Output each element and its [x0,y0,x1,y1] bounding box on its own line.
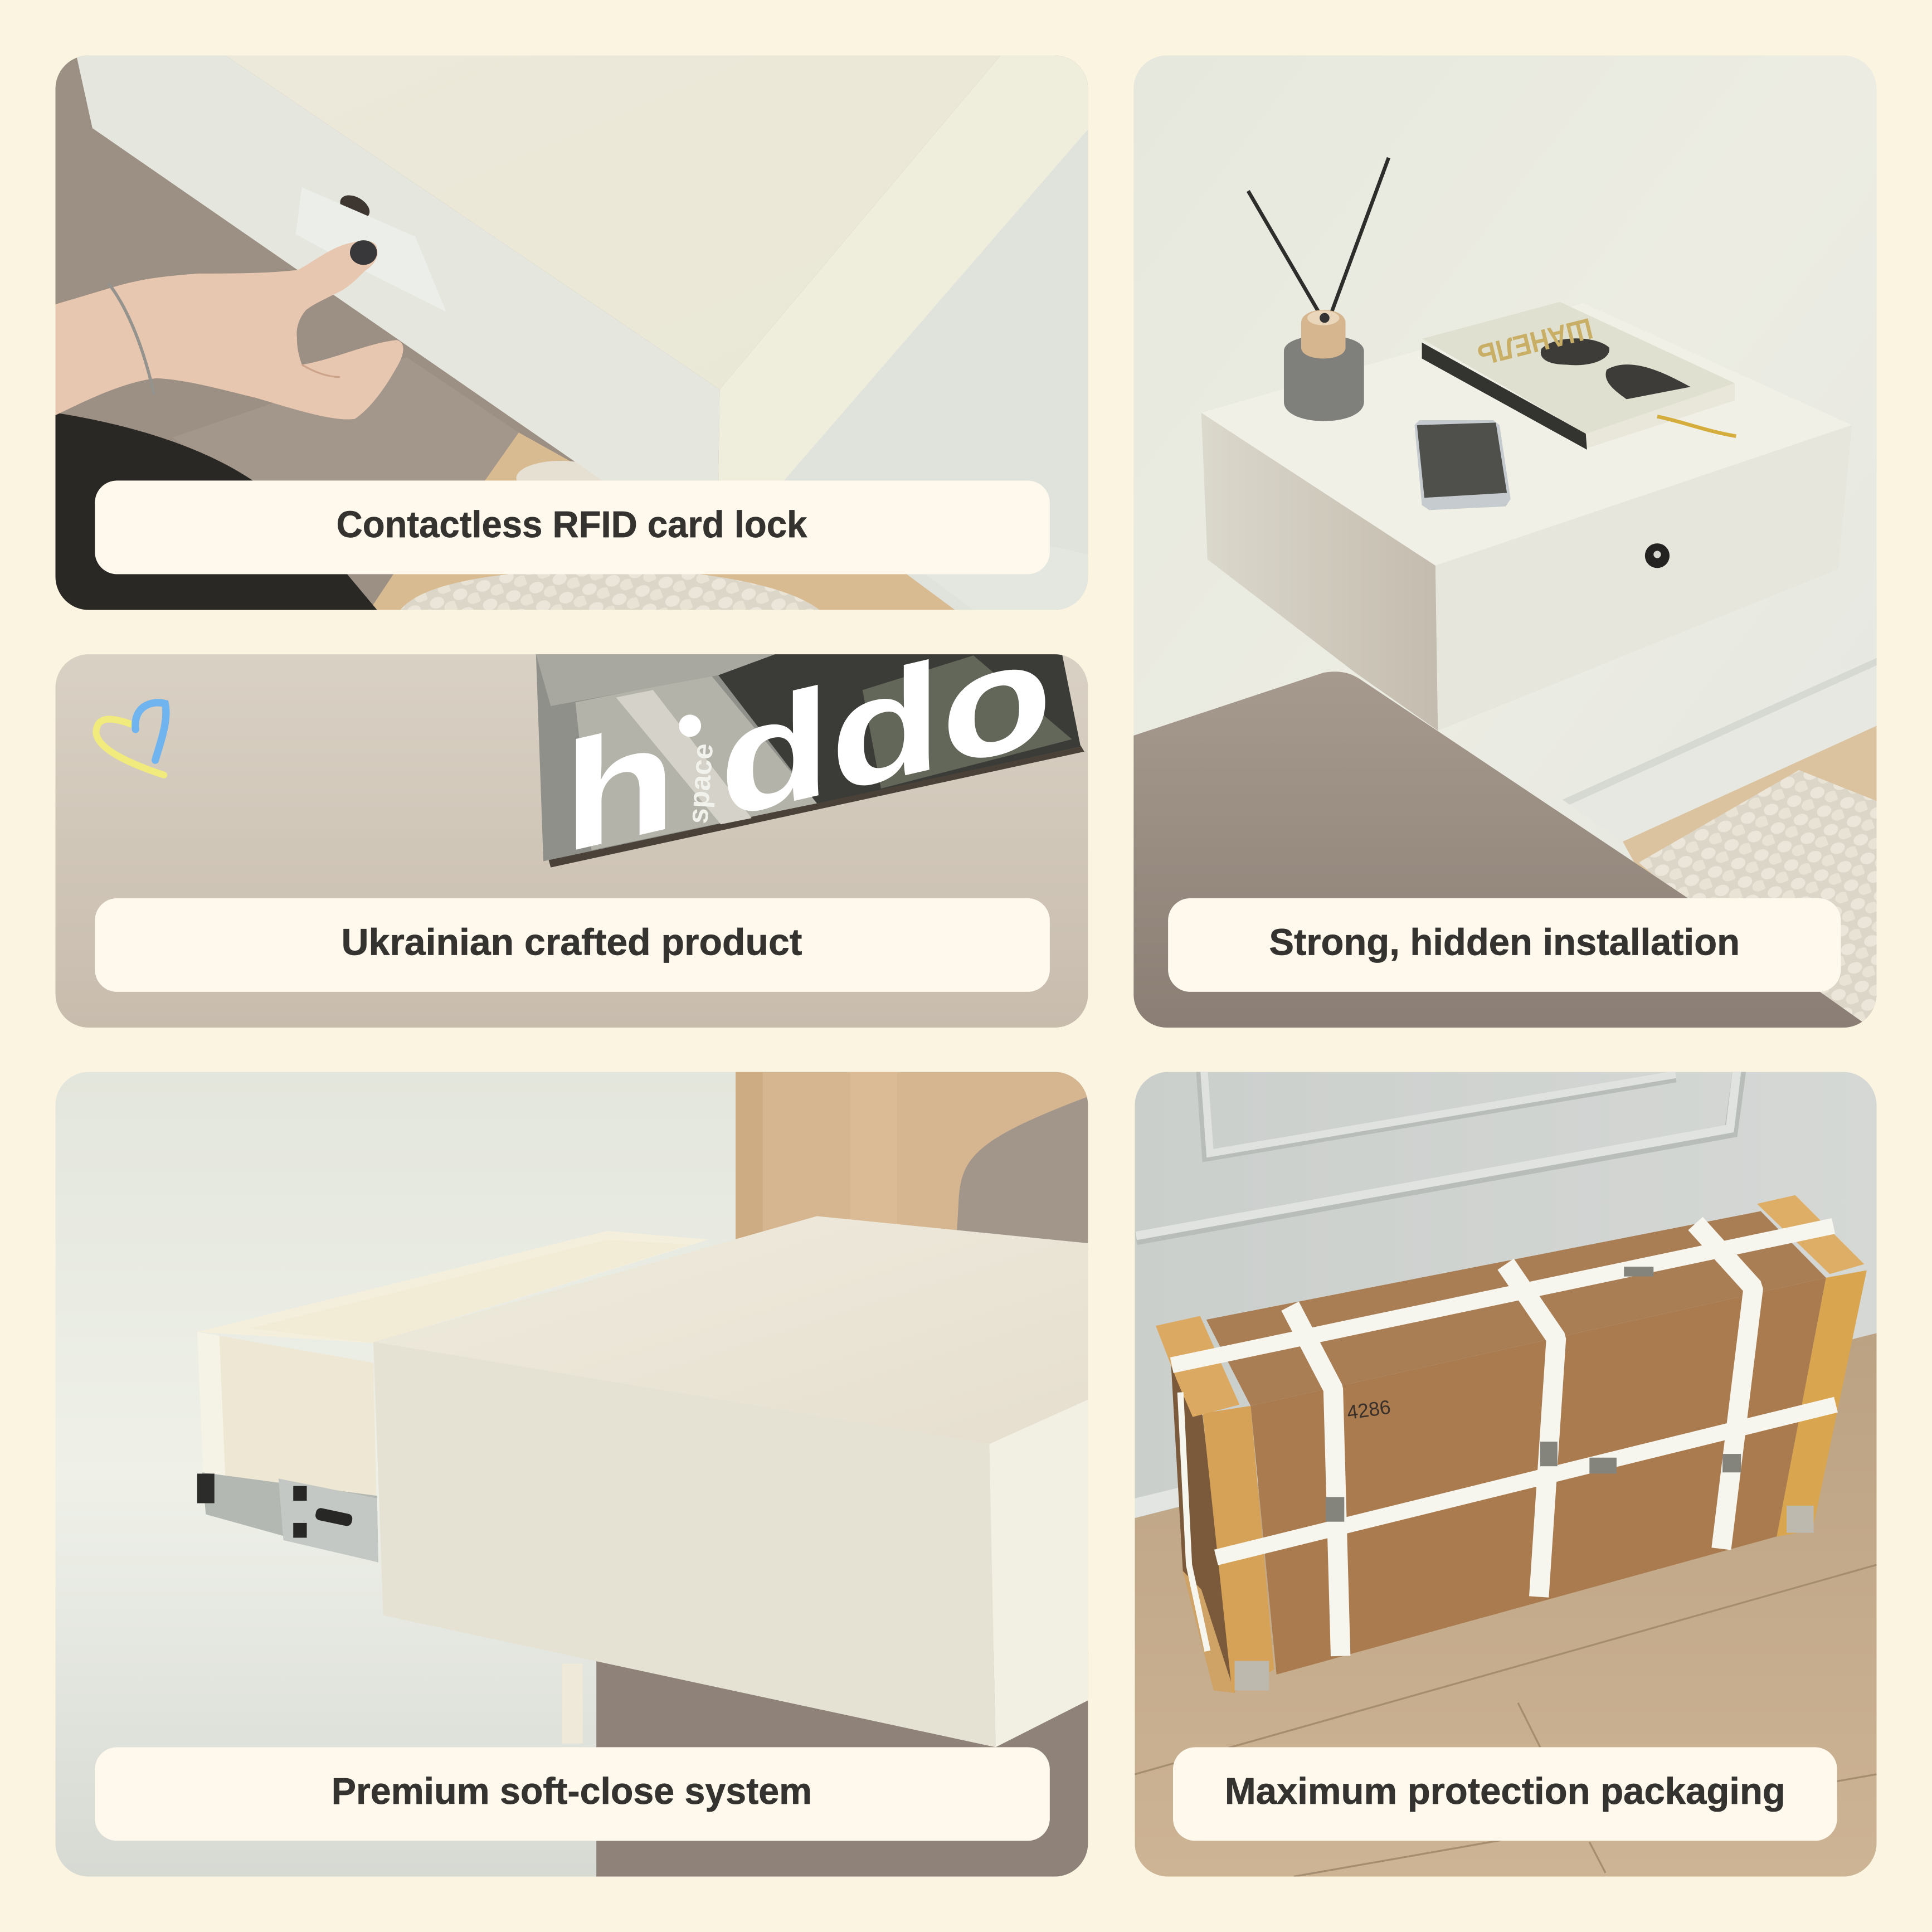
baseboard strip [1135,1482,1201,1518]
floor and rug [369,432,961,610]
book portrait [1541,338,1609,365]
wooden cap left [1156,1316,1239,1417]
black clothing [55,413,377,610]
caption pill [1168,898,1841,992]
caption pill: Contactless RFID card lock [337,504,807,546]
baseboard [1563,658,1877,841]
wall trim [562,1663,583,1744]
brochure logotype: h [563,688,677,885]
fingernail [350,240,377,265]
rug [1639,770,1877,1028]
panel: Ukrainian crafted product [55,604,1088,1028]
wall [739,123,1088,610]
top cardboard face [1206,1211,1826,1406]
sofa seam [173,357,519,486]
icon: Ukrainian heart [96,703,166,775]
brochure logotype [563,604,1052,885]
wood panel [736,1072,1088,1257]
wooden batten left [1203,1406,1274,1693]
caption pill: Premium soft-close system [332,1771,812,1812]
drawer top [226,55,1000,390]
left side dark [1171,1355,1235,1693]
drawer [1201,303,1852,731]
card [296,187,446,312]
strap clips [1326,1267,1741,1522]
photo: brochure on beige surface [55,604,1088,1028]
panel: contactless RFID card lock [55,55,1088,610]
wooden cap right [1757,1195,1864,1274]
book [1422,302,1736,450]
caption pill: Strong, hidden installation [1269,922,1740,963]
card lock [336,191,374,223]
logotype dot [679,714,701,737]
caption pill [95,1747,1050,1841]
package [1156,1195,1867,1693]
straps [1172,1224,1836,1656]
drawer lock [1645,543,1670,568]
floor [1623,726,1877,1028]
sofa lower [596,1651,1088,1877]
caption pill: Ukrainian crafted product [341,922,802,963]
sofa back [956,1097,1088,1250]
brochure logotype: ddo [719,604,1052,850]
photo: strapped cardboard package [1135,1067,1877,1877]
caption pill [95,898,1050,992]
drawer side face [718,55,1088,486]
photo: floating drawer on wall [1133,55,1877,1028]
caption pill: Maximum protection packaging [1225,1771,1785,1812]
handwritten number: 4286 [1346,1396,1392,1424]
floor plank lines [1135,1565,1877,1877]
brochure small word: space [682,742,719,825]
front cardboard face [1250,1278,1826,1675]
reed diffuser [1248,158,1389,421]
photo: hand holding card to drawer [55,55,1088,610]
drawer front face [76,55,719,486]
hand [55,241,403,420]
sofa [1133,671,1870,1028]
phone [1414,420,1511,510]
panel: maximum protection packaging [1135,1067,1877,1877]
panel: premium soft-close system [55,1072,1088,1877]
drawer slide rail [197,1472,378,1563]
caption pill [95,480,1050,574]
bookmark [1657,416,1736,436]
bracelet [109,284,154,395]
drawer front block [373,1216,1088,1747]
open drawer box [197,1231,708,1528]
photo: open drawer with rail [55,1072,1088,1877]
wall moulding [1136,1067,1740,1238]
wooden batten right [1777,1271,1867,1536]
staple plates [1235,1506,1814,1691]
panel: strong hidden installation [1133,55,1877,1028]
floor [1135,1333,1877,1877]
caption pill [1173,1747,1837,1841]
book title: ШАНЕЛЬ [1474,312,1596,372]
brochure [536,604,1084,885]
